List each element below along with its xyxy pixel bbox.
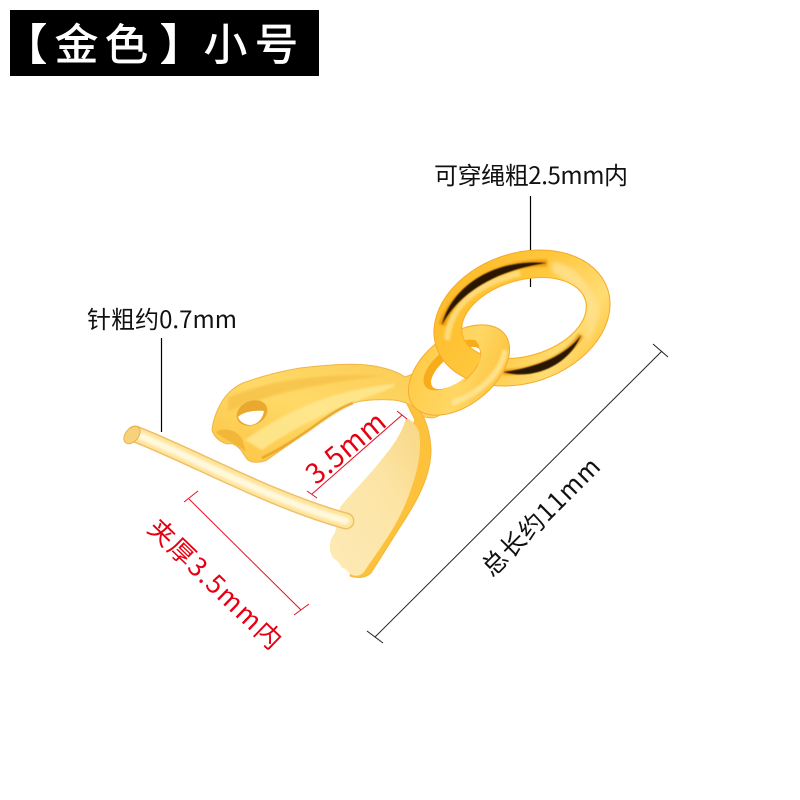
pin tip [121, 423, 143, 447]
title banner: 金 [55, 11, 98, 73]
dimension line: 3.5mm opening [307, 411, 407, 498]
dimension line: total length [367, 344, 668, 643]
leader line: needle thickness [160, 338, 162, 432]
wing hole [232, 395, 272, 431]
back leg of bail [330, 418, 420, 576]
small ring front segment [424, 324, 510, 416]
label: cord thickness: 可穿绳粗2.5mm内 [434, 156, 628, 191]
small jump ring [392, 307, 526, 433]
label: clamp thickness: 夹厚3.5mm内 [141, 509, 291, 657]
title banner: 号 [255, 11, 298, 73]
label: total length: 总长约11mm [472, 448, 608, 584]
large ring [433, 250, 611, 386]
pendant bail illustration [121, 227, 629, 578]
title banner: 小 [204, 11, 247, 73]
title banner: 【 [4, 11, 47, 73]
front wing of bail [212, 364, 440, 462]
title banner: 】 [160, 11, 203, 73]
wing shading bands [216, 375, 395, 458]
title banner [4, 10, 319, 76]
label: needle thickness: 针粗约0.7mm [87, 300, 237, 335]
title banner: 色 [105, 11, 148, 73]
leader line: cord thickness [530, 196, 532, 287]
dimension line: clamp thickness [184, 491, 309, 615]
pin shaft [135, 434, 346, 521]
leg outer rim [350, 398, 431, 578]
label: 3.5mm: 3.5mm [296, 401, 394, 493]
